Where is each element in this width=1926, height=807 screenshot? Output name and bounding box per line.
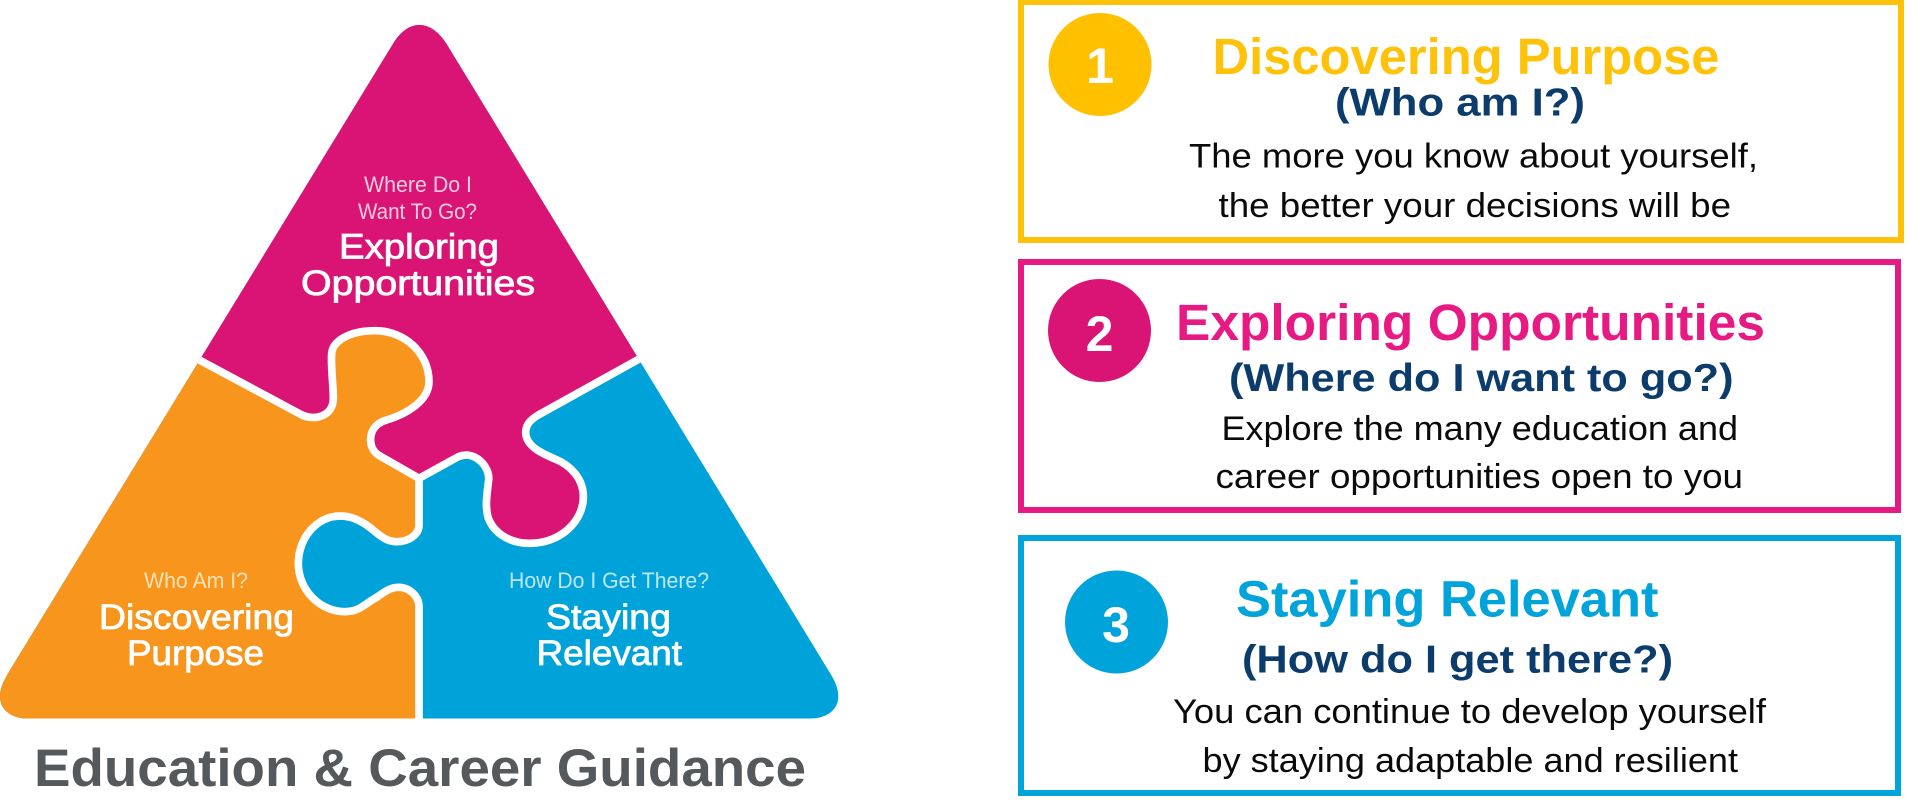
label: where do I want to go: Exploring [339,228,499,266]
description: The more you know about yourself, [1189,138,1758,176]
label: how do I get there [509,568,709,673]
icon: number 2 circle: 2 [1086,306,1113,362]
description [1173,693,1767,780]
subheading: (Where do I want to go?) [1229,357,1734,400]
subheading: (Who am I?) [1335,82,1585,124]
label: who am I: Purpose [127,634,264,673]
description: Explore the many education and [1222,410,1738,448]
icon: number 3 circle: 3 [1102,597,1130,653]
label: where do I want to go [301,172,535,303]
subheading: (How do I get there?) [1242,638,1673,682]
piece: discovering purpose (orange) [0,331,429,723]
description: career opportunities open to you [1216,458,1743,496]
label: how do I get there: Staying [546,598,671,637]
icon: number 3 circle [1065,570,1168,674]
description: the better your decisions will be [1218,187,1731,225]
title: Education & Career Guidance [34,739,806,798]
white puzzle seams [190,331,643,723]
label: how do I get there: Relevant [536,634,682,673]
panel: step 1 discovering purpose [1021,2,1901,240]
label: where do I want to go: Want To Go? [358,199,477,224]
heading: Staying Relevant [1236,570,1659,628]
label: who am I [99,568,294,673]
description: by staying adaptable and resilient [1202,742,1739,780]
piece: exploring opportunities (magenta) [190,0,643,543]
panel: puzzle triangle [0,0,850,730]
panel: step 3 staying relevant [1021,538,1898,793]
description [1189,138,1758,225]
description [1216,410,1743,496]
heading: Exploring Opportunities [1176,294,1765,351]
puzzle pieces [0,0,850,730]
heading: Discovering Purpose [1212,28,1720,85]
label: where do I want to go: Where Do I [364,172,472,197]
label: who am I: Who Am I? [144,568,248,593]
panel: step 2 exploring opportunities [1021,262,1898,510]
description: You can continue to develop yourself [1173,693,1767,731]
icon: number 2 circle [1048,279,1151,382]
label: where do I want to go: Opportunities [301,264,535,303]
label: how do I get there: How Do I Get There? [509,568,709,593]
icon: number 1 circle [1048,13,1152,116]
icon: number 1 circle: 1 [1086,38,1114,94]
label: who am I: Discovering [99,598,294,637]
